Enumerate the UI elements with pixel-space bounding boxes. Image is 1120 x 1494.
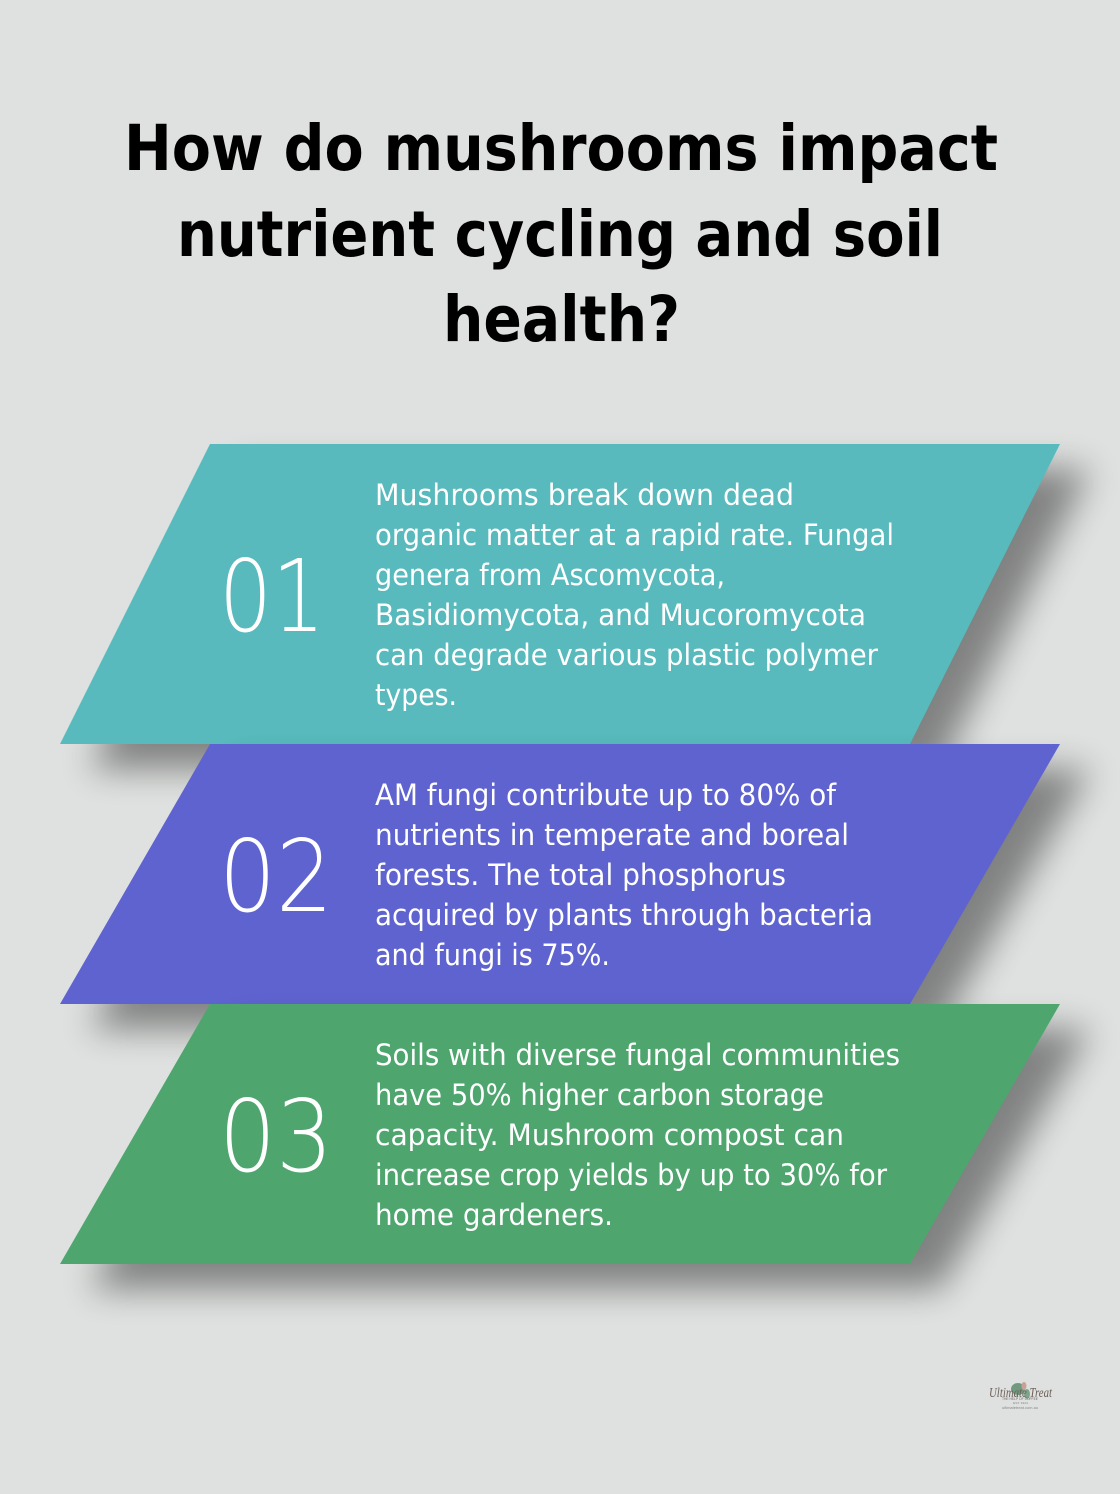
panel 1: organic matter breakdown: organic matter at a rapid rate. Fungal (375, 518, 894, 552)
panel 3: carbon storage and compost: Soils with diverse fungal communities (375, 1038, 900, 1072)
panel 3: carbon storage and compost: home gardeners. (375, 1198, 613, 1232)
logo: Ultimate Treat (989, 1382, 1053, 1410)
logo: Ultimate Treat: ultimatetreat.com.au (1002, 1406, 1038, 1410)
panel 1: organic matter breakdown (60, 444, 1090, 769)
panel 1: organic matter breakdown: can degrade various plastic polymer (375, 638, 878, 672)
panel 3: carbon storage and compost: have 50% higher carbon storage (375, 1078, 824, 1112)
panel 3: carbon storage and compost (60, 1004, 1090, 1289)
title (124, 112, 998, 356)
panel 3: carbon storage and compost: capacity. Mushroom compost can (375, 1118, 844, 1152)
panel 1: organic matter breakdown: 01 (219, 538, 325, 655)
title: health? (443, 283, 680, 356)
logo: Ultimate Treat: THE HELP OF COFFEE (1002, 1397, 1039, 1401)
panel 2: AM fungi nutrients: 02 (219, 818, 333, 935)
panel 1: organic matter breakdown: Mushrooms break down dead (375, 478, 794, 512)
title: nutrient cycling and soil (177, 198, 943, 271)
panel 2: AM fungi nutrients: nutrients in temperate and boreal (375, 818, 849, 852)
panel 2: AM fungi nutrients: AM fungi contribute up to 80% of (375, 778, 837, 812)
logo: Ultimate Treat: EST 1924 (1013, 1401, 1028, 1405)
panel 3: carbon storage and compost: 03 (219, 1078, 333, 1195)
panel 2: AM fungi nutrients: and fungi is 75%. (375, 938, 610, 972)
panel 2: AM fungi nutrients (60, 744, 1090, 1029)
logo: Ultimate Treat: Ultimate Treat (989, 1386, 1053, 1401)
panel 1: organic matter breakdown: Basidiomycota, and Mucoromycota (375, 598, 866, 632)
panel 1: organic matter breakdown: types. (375, 678, 457, 712)
panel 2: AM fungi nutrients: acquired by plants through bacteria (375, 898, 873, 932)
panel 3: carbon storage and compost: increase crop yields by up to 30% for (375, 1158, 887, 1192)
panel 1: organic matter breakdown: genera from Ascomycota, (375, 558, 725, 592)
title: How do mushrooms impact (124, 112, 998, 185)
panel 2: AM fungi nutrients: forests. The total phosphorus (375, 858, 786, 892)
